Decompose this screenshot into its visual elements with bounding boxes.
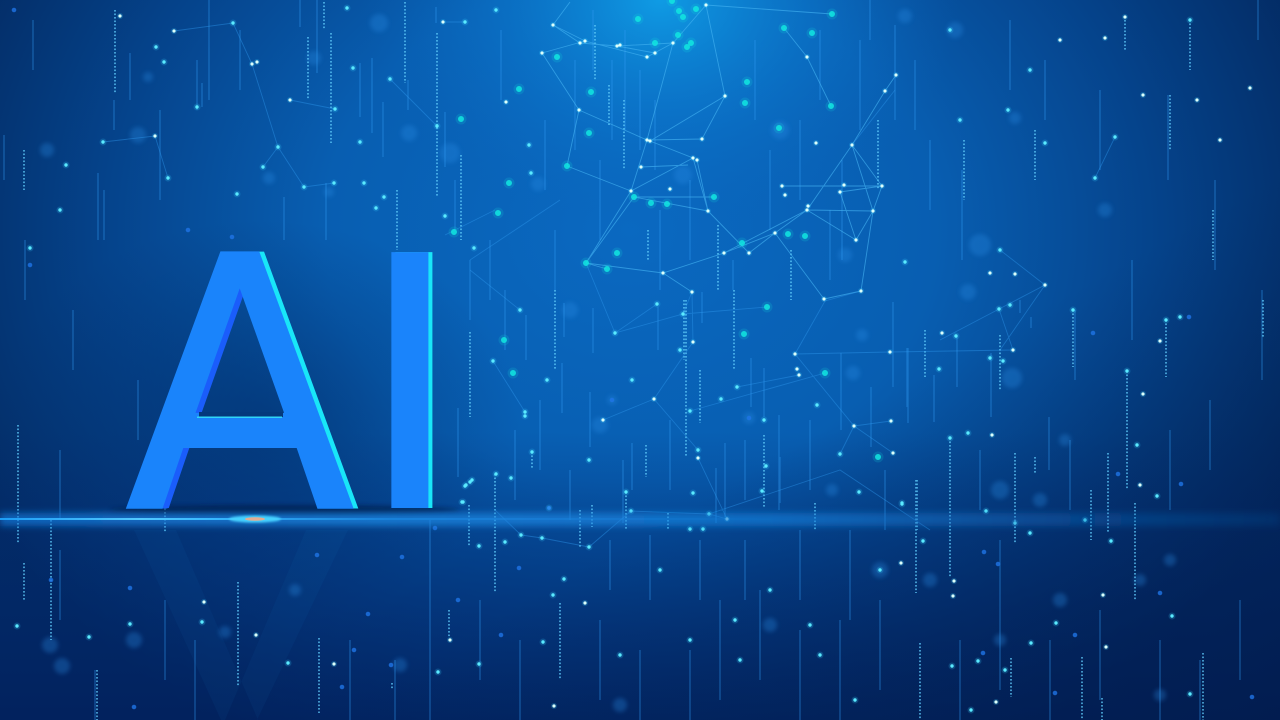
plexus network: [103, 2, 1115, 547]
lens flare: [229, 516, 281, 522]
floor reflection of AI: [134, 530, 348, 720]
letter A: A: [124, 183, 357, 592]
letter I: I: [354, 183, 465, 591]
title: AI: [124, 183, 469, 592]
letter I: I: [358, 183, 469, 591]
letter A: A: [131, 183, 363, 592]
letter A: A: [129, 183, 362, 592]
cyan node halos: [454, 1, 878, 457]
contact shadow under letters: [110, 505, 460, 515]
horizon light beam: [0, 513, 1280, 526]
